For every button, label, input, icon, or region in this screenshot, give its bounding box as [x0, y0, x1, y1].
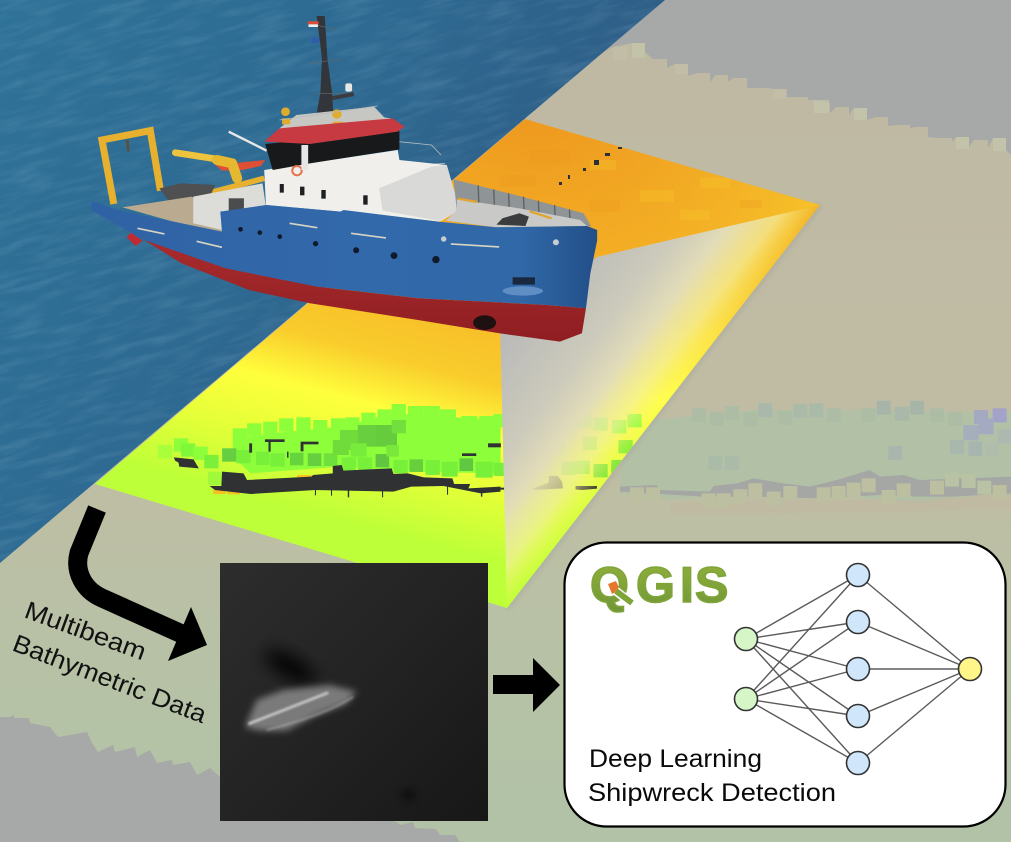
- panel caption: Deep Learning: [589, 745, 762, 773]
- neural network edges: [746, 575, 970, 763]
- sonar wreck ridge: [248, 693, 328, 724]
- bridge windows: [265, 131, 399, 170]
- rear deck: [122, 197, 222, 232]
- blue hull: [91, 201, 597, 308]
- swath blocks and soundings: [559, 147, 762, 208]
- yellow deck strip: [458, 199, 552, 218]
- QGIS logo: QGIS: [590, 557, 728, 613]
- bulwark stanchions: [478, 185, 570, 221]
- deck crane: [175, 153, 237, 178]
- sonar swath: [95, 119, 820, 608]
- terrain wreck stripe (right): [620, 401, 1011, 513]
- white davit arm: [229, 132, 267, 151]
- sonar wreck body: [245, 685, 357, 731]
- panel caption: [588, 745, 836, 807]
- upper terrain blocks: [613, 43, 1006, 151]
- sonar wreck shadow: [260, 644, 320, 689]
- bow bulwark: [446, 179, 591, 227]
- square windows: [280, 145, 368, 205]
- orange patches under wreck: [213, 475, 311, 494]
- red lower hull: [144, 240, 586, 342]
- output node: [958, 658, 982, 680]
- input nodes: [734, 628, 758, 710]
- red wheelhouse roof: [264, 118, 404, 144]
- research vessel: [91, 16, 597, 342]
- rudder: [127, 233, 143, 246]
- upper deck: [279, 107, 393, 129]
- mast: [307, 16, 354, 117]
- A-frame crane: [102, 131, 160, 204]
- rescue boat: [215, 160, 265, 171]
- bow thruster: [473, 315, 496, 330]
- portholes: [238, 227, 440, 263]
- life ring: [292, 166, 302, 175]
- machinery on deck: [229, 198, 244, 212]
- sea surface: [0, 0, 665, 563]
- sonar image panel: [220, 563, 488, 821]
- panel: deep learning detection: [564, 542, 1006, 826]
- rails: [279, 106, 445, 175]
- shaded superstructure corner: [379, 165, 457, 221]
- arrow to detection panel: [493, 658, 560, 712]
- curved arrow to sonar image: [78, 509, 207, 661]
- gray sonar beam: [500, 205, 820, 608]
- hidden nodes: [846, 564, 870, 774]
- label: Multibeam Bathymetric Data: Multibeam: [21, 596, 150, 666]
- bow deck: [446, 199, 587, 227]
- soft edge of sonar beam: [507, 205, 820, 608]
- aft deck machinery: [159, 183, 215, 200]
- deck house side: [193, 183, 266, 230]
- anchor pocket: [502, 277, 543, 296]
- seafloor wreck: green depth blocks: [158, 404, 642, 497]
- label: Multibeam Bathymetric Data: [9, 596, 210, 729]
- panel caption: Shipwreck Detection: [588, 779, 836, 807]
- bow winch: [496, 213, 529, 226]
- white superstructure: [264, 150, 457, 222]
- hawse fittings: [441, 236, 559, 245]
- yellow boom: [202, 178, 264, 195]
- label: Multibeam Bathymetric Data: Bathymetric Data: [9, 629, 210, 729]
- yellow lights: [281, 107, 343, 129]
- wreck void: [174, 439, 597, 497]
- hull vents: [137, 223, 499, 247]
